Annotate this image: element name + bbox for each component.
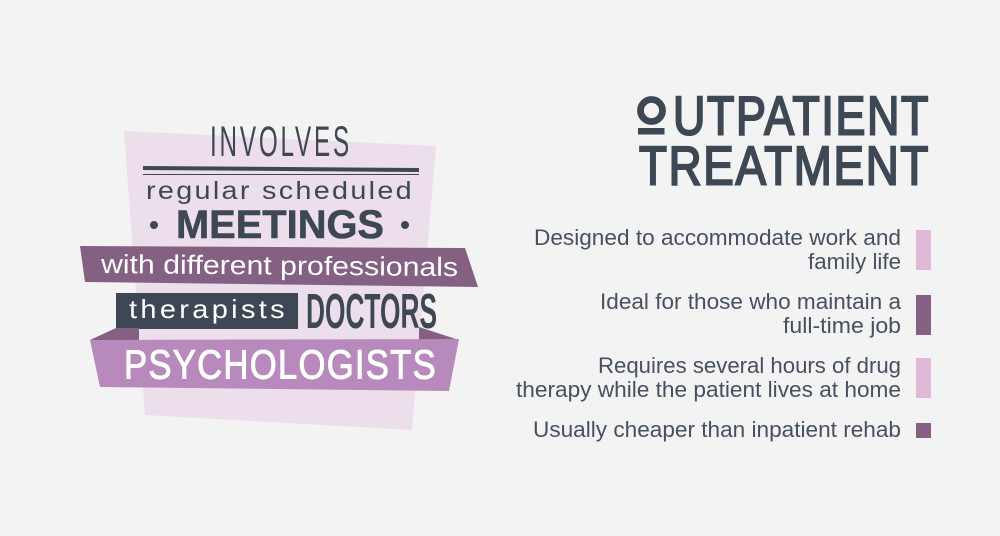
item 3 bar — [916, 358, 931, 398]
small underlined O — [638, 100, 664, 134]
item 1 text: Designed to accommodate work and — [534, 225, 901, 250]
list: treatment features — [516, 225, 931, 442]
double rule — [143, 166, 419, 175]
title: outpatient treatment: UTPATIENT — [673, 84, 930, 146]
ribbon: with different professionals: with different professionals — [100, 249, 458, 282]
title: outpatient treatment: TREATMENT — [639, 134, 930, 196]
ribbon: psychologists: PSYCHOLOGISTS — [124, 342, 437, 388]
item 3 text: therapy while the patient lives at home — [516, 377, 901, 402]
label: therapists: therapists — [129, 294, 288, 324]
panel: involves typographic collage — [80, 118, 478, 430]
item 1 bar — [916, 230, 931, 270]
item 2 text — [600, 289, 902, 338]
item 2 text: full-time job — [783, 313, 901, 338]
item 3 text: Requires several hours of drug — [598, 353, 901, 378]
text: doctors: DOCTORS — [306, 285, 437, 339]
item 4 bar — [916, 423, 931, 438]
title: outpatient treatment — [638, 84, 930, 196]
item 2 bar — [916, 295, 931, 335]
heading: involves: INVOLVES — [210, 118, 352, 166]
item 4 text: Usually cheaper than inpatient rehab — [533, 417, 901, 442]
item 2 text: Ideal for those who maintain a — [600, 289, 902, 314]
label: therapists — [116, 293, 298, 329]
item 1 text: family life — [808, 249, 901, 274]
text: meetings with dots: MEETINGS — [176, 203, 384, 247]
text: regular scheduled: regular scheduled — [146, 177, 414, 205]
background panel — [124, 131, 436, 430]
ribbon: with different professionals — [80, 246, 478, 287]
ribbon: psychologists — [90, 327, 459, 391]
item 1 text — [534, 225, 901, 274]
item 3 text — [516, 353, 901, 402]
